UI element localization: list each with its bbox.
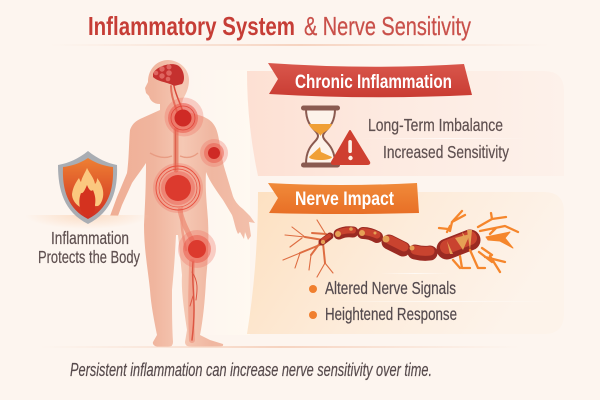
footer caption: Persistent inflammation can increase nerve sensitivity over time. — [70, 360, 432, 380]
title — [88, 11, 471, 41]
panel: nerve impact — [247, 183, 564, 334]
chest lines — [150, 153, 198, 157]
ribbon: nerve impact: Nerve Impact — [295, 188, 394, 210]
text: inflammation protects the body: Protects the Body — [38, 247, 140, 267]
axon segments — [322, 232, 470, 253]
shield glow — [25, 215, 150, 243]
body silhouette — [110, 60, 255, 347]
title: Inflammatory System — [88, 11, 295, 41]
icon: hourglass — [301, 106, 340, 168]
human body figure — [110, 60, 255, 347]
text: long-term imbalance: Long-Term Imbalance — [368, 115, 503, 135]
text: inflammation protects the body — [38, 228, 140, 267]
icon: warning triangle — [332, 131, 369, 164]
dendrites — [283, 220, 333, 277]
nerve lines — [171, 86, 197, 340]
ribbon: chronic inflammation — [268, 63, 472, 97]
ribbon: chronic inflammation: Chronic Inflammation — [295, 71, 452, 93]
icon: brain — [153, 64, 184, 86]
hot spot: abdomen — [153, 163, 203, 213]
bullet: heightened response — [309, 304, 457, 324]
panel: chronic inflammation — [247, 63, 564, 176]
floor line — [40, 346, 520, 348]
text: inflammation protects the body: Inflammation — [51, 228, 129, 248]
hot spot: upper back — [164, 98, 204, 136]
hot spot: arm — [200, 139, 228, 167]
icon: flame shield — [58, 151, 117, 224]
bullet: altered nerve signals: Altered Nerve Signals — [325, 278, 456, 298]
ribbon: nerve impact — [268, 183, 419, 214]
bullet: heightened response: Heightened Response — [325, 304, 457, 324]
text: increased sensitivity: Increased Sensitivity — [383, 142, 509, 162]
myelin highlights — [321, 227, 472, 254]
icon: nerve fiber — [283, 211, 518, 277]
nerve sparks — [439, 211, 518, 272]
hot spot: knee — [178, 230, 216, 268]
title: & Nerve Sensitivity — [304, 11, 471, 41]
